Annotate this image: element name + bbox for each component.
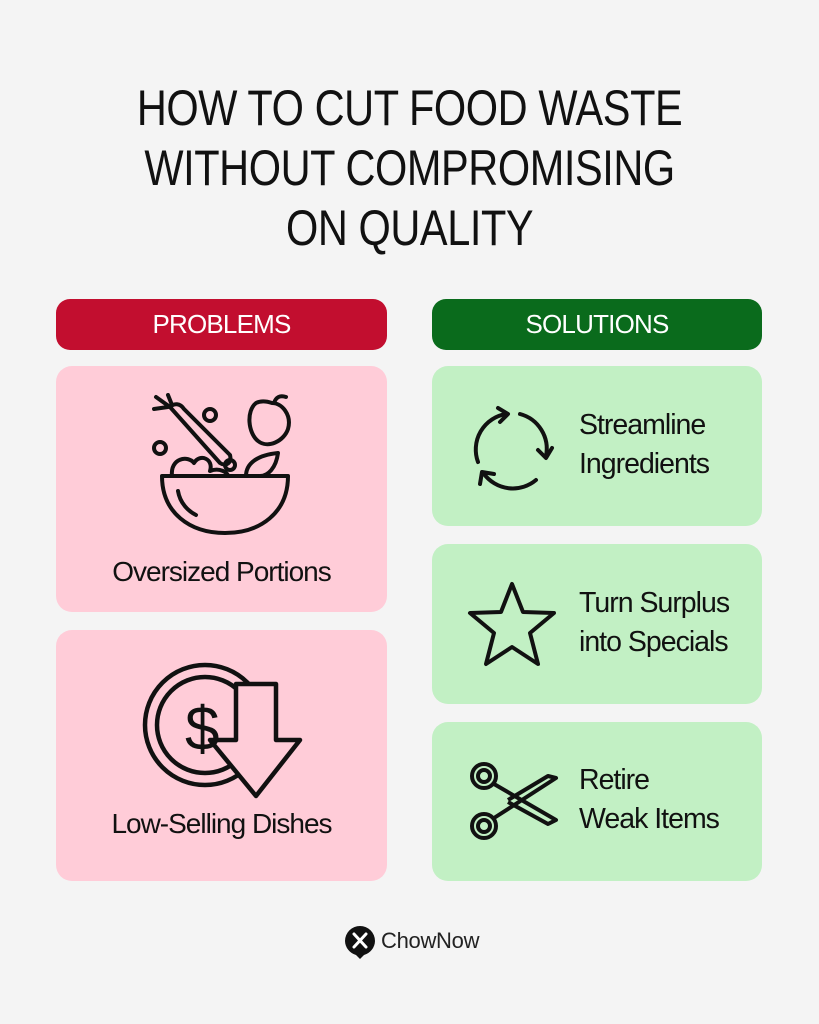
header: problems xyxy=(56,299,387,350)
icon: cycle arrows xyxy=(474,406,554,490)
icon: dollar down xyxy=(142,662,302,798)
label: Oversized Portions xyxy=(112,556,331,587)
header: problems: PROBLEMS xyxy=(152,309,291,339)
icon: salad bowl xyxy=(152,393,291,535)
header: solutions xyxy=(432,299,762,350)
label: into Specials xyxy=(579,626,728,658)
panel: oversized portions xyxy=(56,366,387,612)
label: Weak Items xyxy=(579,803,719,835)
logo: ChowNow xyxy=(345,926,480,959)
icon: star xyxy=(468,582,556,666)
icon: logo mark xyxy=(345,926,375,959)
label xyxy=(579,587,730,658)
label: Turn Surplus xyxy=(579,587,729,619)
title: WITHOUT COMPROMISING xyxy=(144,140,675,196)
label: Retire xyxy=(579,764,649,796)
title xyxy=(137,80,682,256)
wordmark: ChowNow xyxy=(381,928,479,953)
panel: streamline ingredients xyxy=(432,366,762,526)
title: ON QUALITY xyxy=(286,200,533,256)
panel: surplus specials xyxy=(432,544,762,704)
label: Streamline xyxy=(579,409,705,441)
icon: scissors xyxy=(470,762,558,840)
label xyxy=(579,764,719,835)
label xyxy=(579,409,709,480)
panel: retire weak items xyxy=(432,722,762,881)
header: solutions: SOLUTIONS xyxy=(525,309,669,339)
title: HOW TO CUT FOOD WASTE xyxy=(137,80,682,136)
label: Ingredients xyxy=(579,448,709,480)
panel: low-selling dishes xyxy=(56,630,387,881)
label: Low-Selling Dishes xyxy=(111,808,332,839)
icon: dollar down: $ xyxy=(185,695,219,764)
